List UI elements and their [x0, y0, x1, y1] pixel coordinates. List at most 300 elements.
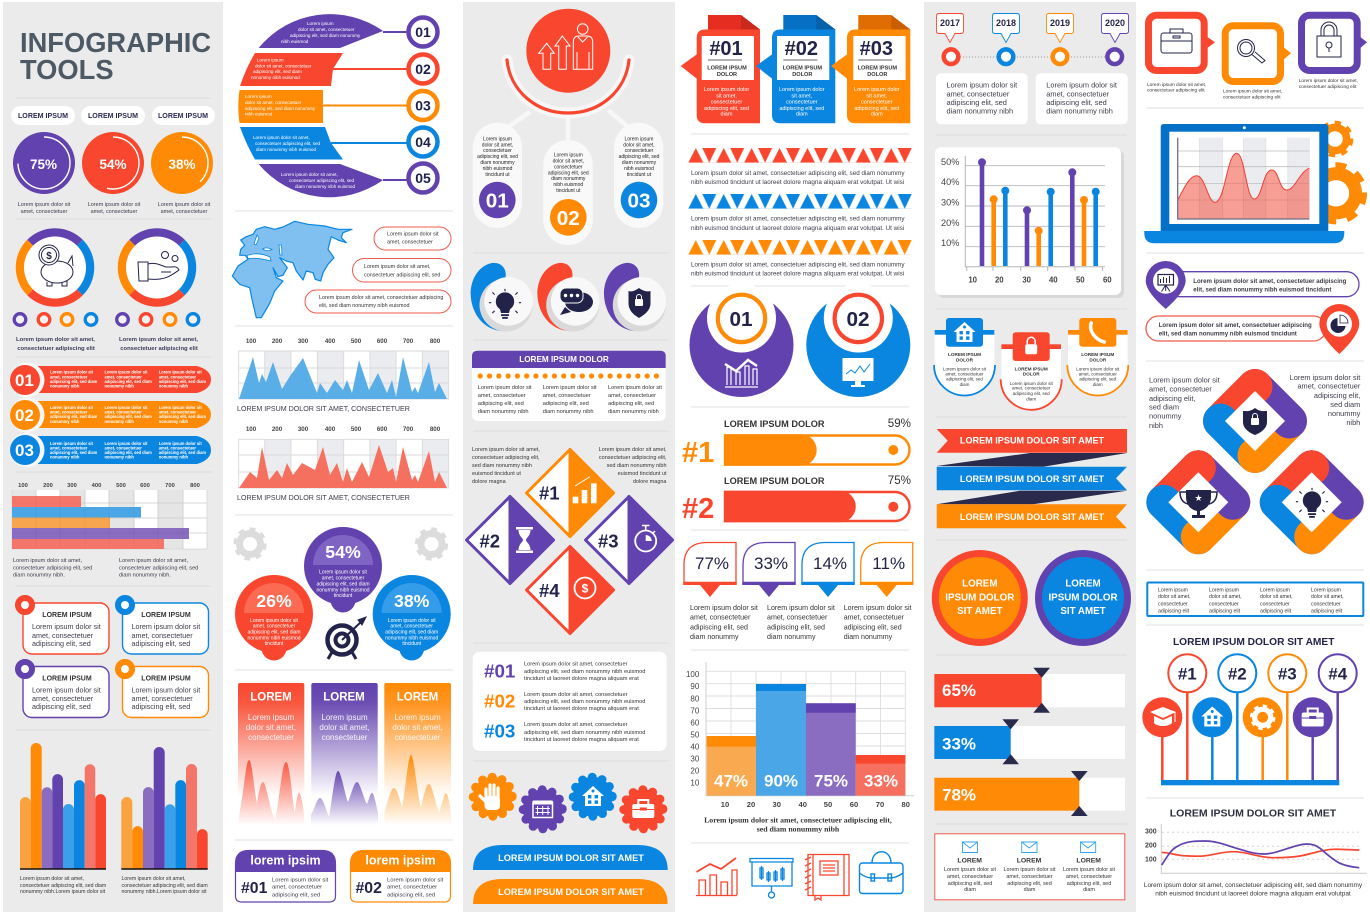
diamond #1: #1: [539, 482, 560, 504]
folded card #02: LOREM IPSUM: [783, 66, 822, 72]
area chart red: 800: [430, 426, 441, 433]
area chart red: [237, 426, 449, 502]
bar 03: [10, 432, 211, 468]
bar 03: nonummy nibh: [104, 454, 134, 459]
chart caption: Lorem ipsum dolor sit amet, consectetuer adipiscing elit,: [704, 816, 892, 825]
diamond #3: [586, 496, 672, 584]
shield card blue: [934, 318, 995, 396]
circle label blue: IPSUM DOLOR: [1048, 592, 1118, 603]
triangle rows with text: Lorem ipsum dolor sit amet, consectetuer adipiscing elit, sed diam nonummy: [691, 262, 905, 268]
area chart blue: 700: [403, 338, 414, 345]
segment 4: Lorem ipsum dolor sit amet,: [253, 135, 310, 140]
lollipop chart: 40%: [941, 177, 959, 187]
bar 03: amet, consectetuer: [159, 445, 196, 450]
icon: people and arrows: [526, 9, 610, 93]
panel header: LOREM IPSUM DOLOR: [519, 355, 609, 364]
shield card orange: LOREM IPSUM: [1081, 352, 1114, 357]
column chart right: [121, 747, 208, 869]
bar 02: amet, consectetuer: [159, 410, 196, 415]
pill 02: [543, 140, 593, 245]
icon: chart: [725, 360, 758, 387]
bubble 38%: tincidunt: [402, 641, 422, 647]
ring text right: nibh: [1346, 418, 1360, 427]
area chart blue: 400: [325, 338, 336, 345]
pin #1: #1: [1178, 664, 1197, 684]
icon box: briefcase: consectetuer adipiscing elit: [1147, 88, 1205, 94]
shield card orange: adipiscing elit, sed: [1079, 376, 1117, 382]
stat text: diam nonummy: [767, 633, 816, 641]
progress #2: #2: [682, 493, 714, 525]
contact box: adipiscing elit, sed: [948, 881, 992, 887]
segment 3: [238, 90, 323, 123]
bubble trio: [235, 527, 451, 660]
bar chart with percentages: 100: [686, 670, 700, 679]
diamond #4: $: [582, 582, 589, 596]
icon box: padlock: [1299, 15, 1367, 90]
pill labels: LOREM IPSUM: [18, 112, 68, 120]
folded card #02: Lorem ipsum dolor: [779, 87, 825, 93]
stat text: Lorem ipsum dolor sit: [767, 604, 835, 612]
circle label blue: [1038, 554, 1128, 642]
list item 03: Lorem ipsum dolor sit amet, consectetuer: [524, 722, 628, 728]
lollipop chart: 50: [1076, 276, 1085, 285]
callout 1: [374, 227, 451, 250]
bar 01: Lorem ipsum dolor sit: [159, 370, 202, 375]
callout 1: Lorem ipsum dolor sit: [387, 232, 439, 238]
icon: orange gears: [1309, 123, 1363, 220]
card blue: LOREM IPSUM: [141, 612, 191, 619]
icon: presentation board: [750, 858, 793, 898]
bar 03: amet, consectetuer: [104, 445, 142, 450]
callout 3: [305, 290, 451, 313]
bubble 54%: 54%: [325, 542, 361, 562]
label card orange: adipiscing elit, sed: [387, 892, 435, 898]
panel text: diam nonummy nibh: [608, 409, 659, 415]
shield card red: LOREM IPSUM: [1015, 366, 1048, 371]
bar chart with percentages: 50: [690, 730, 700, 740]
label card purple: lorem ipsim: [250, 854, 321, 868]
title: TOOLS: [20, 54, 114, 85]
label card orange: #02: [356, 880, 382, 897]
pin #2: #2: [1228, 664, 1247, 684]
diamond text left: Lorem ipsum dolor sit amet,: [472, 447, 540, 453]
triangle rows with text: [688, 148, 912, 278]
text box right: adipiscing elit, sed: [1046, 98, 1107, 107]
card red: dolor sit amet,: [246, 723, 296, 732]
shield card blue: Lorem ipsum dolor sit: [943, 366, 987, 372]
contact box: amet, consectetuer: [1006, 874, 1053, 880]
laptop with chart: [1144, 123, 1363, 243]
contact box: Lorem ipsum dolor sit: [1004, 867, 1056, 873]
folded card #01: LOREM IPSUM: [707, 66, 747, 72]
contact box: LOREM: [1076, 858, 1101, 865]
blue text box: consectetuer: [1158, 602, 1188, 608]
icon blob: shield: [604, 263, 666, 332]
pill 03: adipiscing elit, sed: [619, 154, 660, 160]
diamond #2: #2: [480, 530, 500, 552]
pill 02: 02: [557, 207, 580, 230]
folded card #03: adipiscing elit, sed: [854, 106, 899, 112]
ring text left: [1149, 376, 1220, 430]
pin callout purple: Lorem ipsum dolor sit amet, consectetuer adipiscing: [1193, 278, 1347, 285]
folded card #03: DOLOR: [867, 72, 887, 78]
text box left: [936, 73, 1028, 124]
circle 54%: 54%: [99, 157, 127, 172]
text box right: amet, consectetuer: [1046, 89, 1110, 98]
segment 5: Lorem ipsum dolor sit amet,: [281, 172, 338, 177]
lollipop chart: 50%: [941, 157, 959, 167]
ring text right: nonummy: [1328, 409, 1361, 418]
bar 03: adipiscing elit, sed diam: [50, 450, 98, 455]
bubble 26%: 26%: [256, 591, 292, 611]
panel text: amet, consectetuer: [478, 393, 526, 399]
contact box: Lorem ipsum dolor sit: [1063, 867, 1115, 873]
icon: toolbox: [1293, 697, 1333, 737]
ring text left: nonummy: [1149, 412, 1182, 420]
bar 01: nonummy nibh: [50, 383, 80, 388]
map callouts: [305, 227, 451, 313]
callout 77%: [683, 542, 737, 597]
bar chart with percentages: 20: [690, 766, 700, 776]
circle card 01: 01: [729, 308, 753, 331]
segment 3: dolor sit amet, consectetuer: [245, 100, 302, 105]
diamond text right: consectetuer adipiscing elit,: [599, 455, 667, 461]
pill 03: Lorem ipsum: [625, 136, 653, 142]
icon box: magnifier: Lorem ipsum dolor sit amet,: [1223, 88, 1282, 94]
diamond #1: [526, 450, 614, 536]
pin #3: [1268, 654, 1306, 692]
horizontal bar chart: 800: [190, 483, 200, 489]
year 2018: [992, 14, 1020, 64]
blue text box: Lorem ipsum: [1311, 588, 1341, 594]
progress #1: LOREM IPSUM DOLOR: [724, 419, 825, 429]
bar chart with percentages: 80: [901, 800, 910, 809]
bar 02: Lorem ipsum dolor sit: [104, 405, 148, 410]
circle 54%: [82, 132, 144, 194]
progress bar 33%: 33%: [942, 734, 976, 753]
column chart captions: consectetuer adipiscing elit, sed diam: [20, 883, 106, 889]
segment 2: dolor sit amet, consectetuer: [255, 64, 312, 68]
bar chart with percentages: [686, 662, 914, 834]
text box right: [1036, 73, 1128, 124]
icon: gear: [1243, 697, 1283, 737]
pill 03: diam nonummy: [622, 160, 657, 166]
pill 01: 01: [486, 190, 509, 212]
bubble 38%: 38%: [394, 591, 430, 611]
pill 02: diam nonummy: [551, 176, 586, 182]
contact box: diam: [964, 887, 976, 893]
circle card 02: 02: [846, 308, 870, 331]
contact box: [935, 834, 1125, 900]
progress bar 33%: [934, 719, 1125, 764]
panel text: amet, consectetuer: [608, 393, 656, 399]
card red: amet, consectetuer: [32, 631, 94, 640]
segment 4: [240, 127, 343, 160]
lollipop chart: 20: [995, 276, 1004, 285]
icon: house: [1192, 697, 1232, 737]
segment 1: nibh euismod: [281, 39, 309, 44]
progress bar 65%: 65%: [942, 681, 976, 700]
bar 02: amet, consectetuer: [104, 410, 142, 415]
lollipop chart: [935, 147, 1124, 298]
U-shaped arc: [507, 60, 629, 113]
lollipop chart: 30: [1022, 276, 1032, 285]
bar 03: amet, consectetuer: [50, 445, 88, 450]
donut captions: Lorem ipsum dolor sit amet,: [119, 337, 198, 343]
contact box: LOREM: [957, 858, 982, 865]
column chart captions: nonummy nibh.Lorem ipsum dolor sit: [20, 889, 106, 895]
card purple: Lorem ipsum: [321, 713, 368, 722]
hierarchy diagram: [473, 9, 663, 245]
label card purple: [235, 850, 336, 902]
circle label orange: LOREM: [962, 579, 997, 590]
bar chart with percentages: 40: [798, 800, 807, 809]
progress #1: #1: [682, 437, 714, 469]
area chart red: LOREM IPSUM DOLOR SIT AMET, CONSECTETUER: [237, 494, 410, 502]
donut with piggy bank: [6, 218, 104, 317]
circle card 02: [806, 284, 910, 397]
icon: envelopes: [962, 842, 1096, 852]
card blue: Lorem ipsum dolor sit: [132, 622, 200, 631]
area chart blue: LOREM IPSUM DOLOR SIT AMET, CONSECTETUER: [237, 405, 410, 413]
pill 02: adipiscing elit, sed: [548, 170, 589, 176]
shield card red: [1001, 332, 1062, 410]
pill labels: [11, 106, 215, 125]
bar 01: [10, 362, 211, 398]
text box left: diam nonummy nibh: [946, 107, 1013, 116]
column chart captions: Lorem ipsum dolor sit amet,: [20, 876, 84, 882]
ring text right: sed diam: [1330, 400, 1360, 409]
captions: [18, 202, 211, 215]
folded card #03: [832, 15, 910, 123]
number badges: [408, 18, 438, 192]
area chart red: 500: [351, 426, 362, 433]
bar 02: amet, consectetuer: [50, 410, 88, 415]
segment 1: Lorem ipsum: [307, 21, 334, 26]
captions: amet, consectetuer: [161, 209, 208, 215]
pill 01: [473, 123, 522, 228]
panel text: [478, 385, 662, 415]
label card purple: Lorem ipsum dolor sit: [272, 878, 329, 884]
percentage circles block: [11, 106, 215, 215]
folded card #02: diam: [796, 112, 808, 118]
bar chart with percentages: 20: [747, 800, 755, 809]
diamond ring: shield: [1220, 369, 1290, 456]
list item 02: Lorem ipsum dolor sit amet, consectetuer: [524, 692, 628, 698]
label card purple: #01: [241, 880, 268, 897]
icon blob: chat: [537, 263, 600, 332]
callout 14%: 14%: [813, 554, 847, 573]
stat text: amet, consectetuer: [690, 614, 751, 622]
year 2017: [936, 14, 964, 64]
list item 03: adipiscing elit, sed diam nonummy nibh euismod: [524, 730, 645, 736]
diamond ring: trophy: [1164, 450, 1233, 537]
dotted panel: [472, 351, 666, 421]
column chart captions: Lorem ipsum dolor sit amet,: [122, 876, 186, 882]
stat text: amet, consectetuer: [767, 614, 828, 622]
ring text left: Lorem ipsum dolor sit: [1149, 376, 1220, 384]
shield card orange: [1067, 318, 1128, 396]
shield card blue: DOLOR: [956, 357, 974, 362]
callout 2: consectetuer adipiscing elit, sed: [364, 272, 440, 278]
card purple: LOREM IPSUM: [42, 676, 92, 682]
ribbon red: [937, 429, 1127, 453]
stat text: Lorem ipsum dolor sit: [844, 604, 912, 612]
line chart: 300: [1145, 828, 1157, 836]
folded card #01: adipiscing elit, sed: [704, 106, 749, 112]
icon box: magnifier: consectetuer adipiscing elit: [1223, 94, 1281, 100]
bar 02: [10, 398, 211, 432]
label card orange: amet, consectetuer: [387, 884, 437, 890]
icon: pie chart: [1331, 315, 1348, 333]
bar chart with percentages: 75%: [814, 772, 848, 791]
pill labels: LOREM IPSUM: [158, 112, 208, 120]
horizontal bar chart: 400: [92, 483, 101, 489]
segment 5: consectetuer adipiscing elit, sed: [289, 178, 355, 183]
year 2019: [1046, 14, 1074, 64]
donut captions: Lorem ipsum dolor sit amet,: [16, 337, 95, 343]
icon: piggy bank: $: [46, 251, 52, 262]
bar 02: nonummy nibh: [159, 419, 189, 424]
ribbon red: LOREM IPSUM DOLOR SIT AMET: [960, 436, 1105, 446]
segment 1: [259, 14, 383, 48]
progress #2: LOREM IPSUM DOLOR: [724, 476, 825, 486]
horizontal bar chart: 500: [116, 483, 126, 489]
panel: column 5 background: [924, 2, 1136, 912]
bar 03: adipiscing elit, sed diam: [104, 450, 152, 455]
card orange: LOREM IPSUM: [141, 676, 191, 682]
diamond #2: [466, 496, 554, 584]
label card orange: Lorem ipsum dolor sit: [387, 878, 444, 884]
icon: notebook: [805, 854, 849, 900]
icon blob: lightbulb: [471, 263, 533, 332]
diamond text right: sed diam nonummy nibh: [607, 463, 666, 469]
lollipop chart: 10%: [941, 238, 959, 248]
bar 01: amet, consectetuer: [50, 374, 88, 379]
pill 03: 03: [627, 190, 651, 212]
area chart red: 400: [325, 426, 336, 433]
folded card #03: Lorem ipsum dolor: [854, 87, 900, 93]
stat callouts: [683, 542, 913, 597]
icon: hand and coins: [138, 252, 179, 281]
bubble 26%: Lorem ipsum dolor sit: [250, 618, 299, 624]
panel text: adipiscing elit, sed: [543, 401, 589, 407]
bar 01: adipiscing elit, sed diam: [159, 379, 206, 384]
triangle rows with text: Lorem ipsum dolor sit amet, consectetuer adipiscing elit, sed diam nonummy: [691, 216, 905, 222]
callout 3: elit, sed diam nonummy nibh euismod: [319, 303, 410, 309]
bar 02: nonummy nibh: [104, 419, 134, 424]
card purple: adipiscing elit, sed: [32, 702, 91, 711]
contact box: diam: [1083, 887, 1095, 893]
icon: grey gears: [236, 530, 446, 558]
ring text right: Lorem ipsum dolor sit: [1290, 373, 1360, 382]
shield card red: amet, consectetuer: [1012, 386, 1051, 391]
ring text right: [1290, 373, 1361, 427]
bar 03: 03: [15, 441, 34, 460]
panel: column 1 background: [3, 2, 223, 912]
horizontal bar chart: [12, 483, 207, 549]
pill 03: [614, 123, 663, 228]
shield card blue: diam: [960, 382, 970, 387]
segmented circle list: [238, 14, 438, 197]
folded card #01: sit amet,: [716, 94, 737, 100]
horizontal bar chart: 300: [67, 483, 77, 489]
shield card red: diam: [1026, 396, 1036, 401]
ribbon orange: LOREM IPSUM DOLOR SIT AMET: [960, 512, 1105, 522]
blue text box: dolor sit amet,: [1209, 594, 1242, 600]
ribbon orange: [937, 504, 1127, 528]
bar 01: adipiscing elit, sed diam: [104, 379, 152, 384]
card red: consectetuer: [248, 733, 294, 742]
banner blue: [473, 845, 668, 870]
pin #4: [1319, 654, 1357, 692]
card red: Lorem ipsum: [248, 713, 294, 722]
pill 01: nibh euismod: [483, 166, 513, 172]
bar chart caption: consectetuer adipiscing elit, sed: [13, 566, 92, 572]
scalloped badge: calendar: [523, 789, 563, 829]
shield card blue: amet, consectetuer: [945, 371, 984, 376]
folded card #01: consectetuer: [711, 100, 742, 106]
captions: Lorem ipsum dolor sit: [88, 202, 141, 208]
icon: monitor: [842, 358, 874, 387]
ribbon blue: [937, 467, 1127, 490]
bar 02: Lorem ipsum dolor sit: [50, 405, 93, 410]
bar 03: Lorem ipsum dolor sit: [159, 441, 202, 446]
progress bar 78%: [934, 771, 1125, 816]
folded card #01: #01: [709, 38, 743, 60]
scalloped badge: house: [573, 777, 613, 817]
circle label orange: SIT AMET: [957, 606, 1002, 617]
world map: [232, 221, 352, 318]
label card orange: lorem ipsim: [365, 854, 436, 868]
callout 33%: [742, 542, 796, 597]
scalloped badge: hand: [473, 777, 513, 817]
card orange: consectetuer: [395, 733, 441, 742]
bar 01: adipiscing elit, sed diam: [50, 379, 98, 384]
blue text box: adipiscing elit: [1260, 608, 1292, 614]
column chart left: [20, 743, 106, 869]
list item 01: #01: [484, 660, 515, 682]
card orange: Lorem ipsum dolor sit: [132, 686, 200, 694]
stat text: diam nonummy: [690, 633, 739, 641]
diamond text left: consectetuer adipiscing elit,: [472, 455, 540, 461]
callout 77%: 77%: [695, 554, 729, 573]
circle 38%: 38%: [168, 157, 196, 172]
bar 03: Lorem ipsum dolor sit: [104, 441, 148, 446]
bar chart caption: [13, 558, 198, 578]
contact box: Lorem ipsum dolor sit: [944, 867, 996, 873]
area chart blue: 200: [272, 338, 283, 345]
icon box: padlock: Lorem ipsum dolor sit amet,: [1299, 78, 1358, 84]
blue text box: consectetuer: [1260, 602, 1290, 608]
card orange: adipiscing elit, sed: [132, 702, 190, 711]
icon: target: [328, 617, 366, 659]
bar 03: nonummy nibh: [159, 454, 189, 459]
blue text box: Lorem ipsum: [1260, 588, 1290, 594]
bar 02: adipiscing elit, sed diam: [159, 414, 206, 419]
icon box: briefcase: [1147, 15, 1215, 94]
pill 03: nibh euismod: [624, 166, 654, 172]
horizontal bar chart: 700: [165, 483, 175, 489]
folded card #02: #02: [785, 38, 818, 60]
area chart blue: 100: [246, 338, 257, 345]
diamond text right: dolore magna: [633, 479, 667, 485]
shield card red: adipiscing elit, sed: [1013, 391, 1050, 396]
card red: adipiscing elit, sed: [32, 639, 91, 648]
ribbons: [937, 429, 1127, 528]
pill 02: consectetuer: [554, 164, 583, 170]
progress bar 78%: 78%: [942, 786, 976, 805]
